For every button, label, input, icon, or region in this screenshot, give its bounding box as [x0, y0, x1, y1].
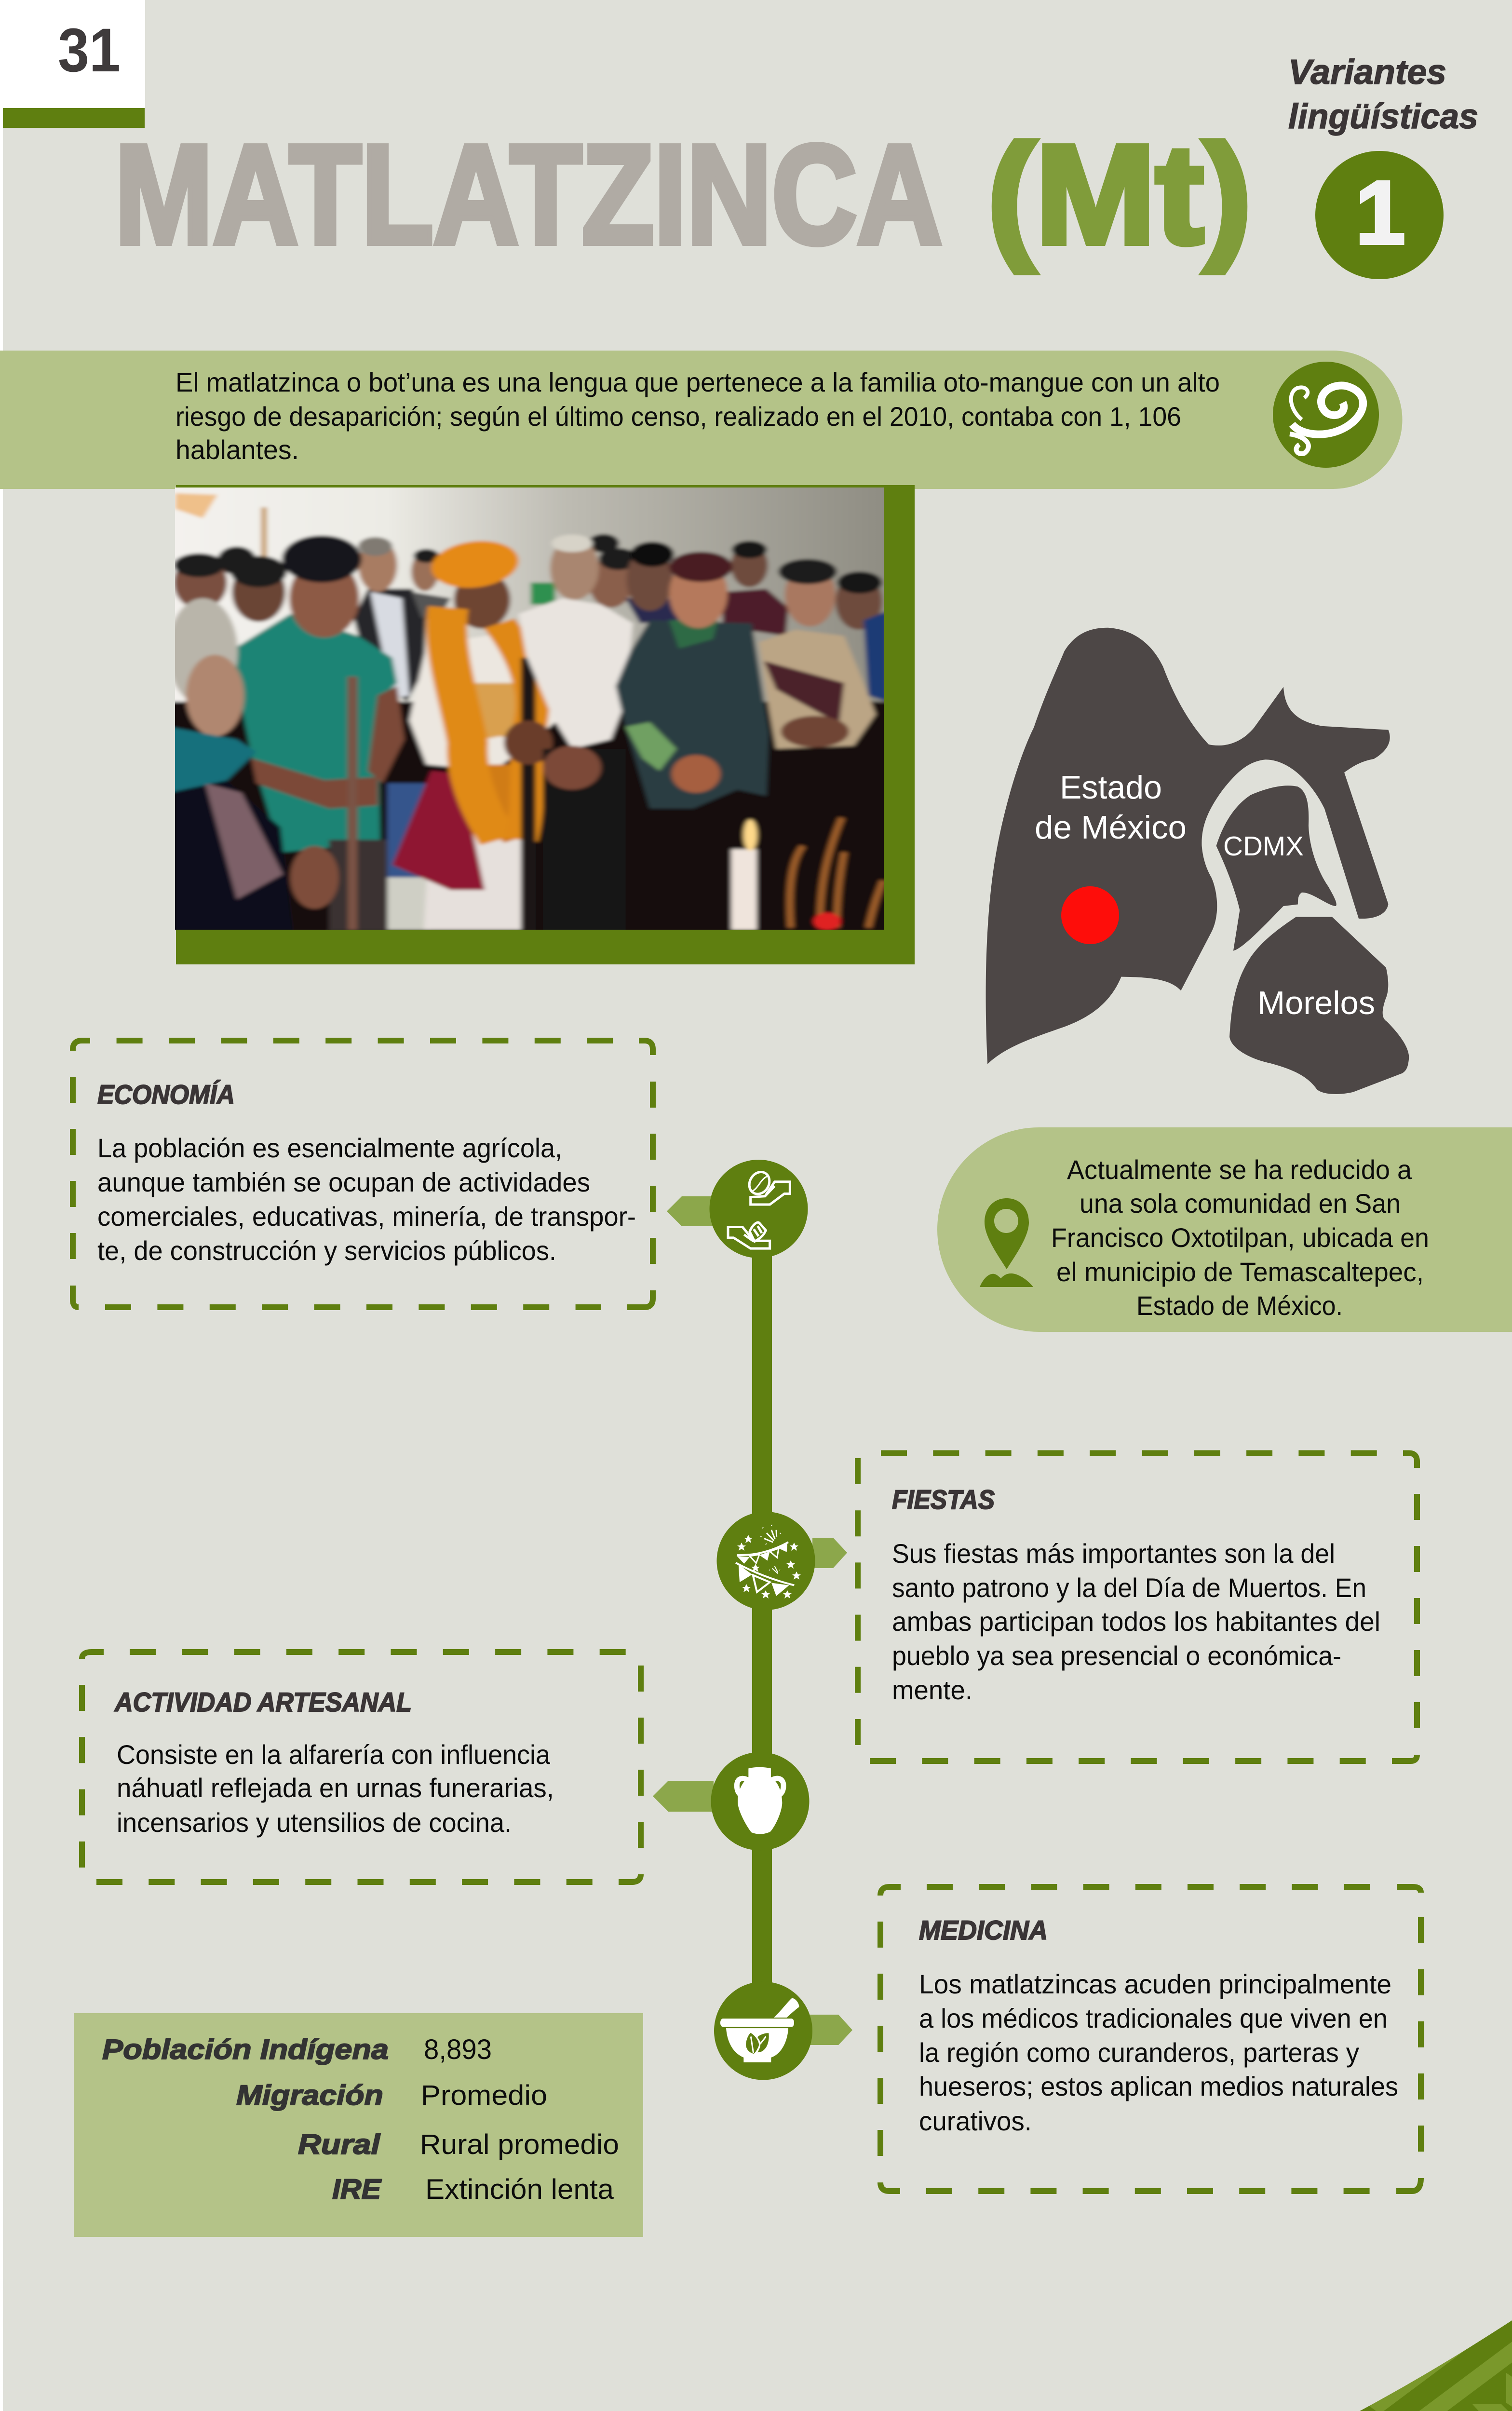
location pill: Estado de México.	[1136, 1290, 1343, 1321]
icon: festive bunting	[716, 1512, 815, 1610]
map labels: Morelos	[1257, 985, 1375, 1021]
variant count badge	[1315, 151, 1444, 279]
panel: actividad artesanal: Consiste en la alfarería con influencia	[117, 1739, 551, 1770]
variantes lingüísticas label: lingüísticas	[1288, 97, 1478, 136]
panel: medicina: MEDICINA	[919, 1915, 1048, 1945]
panel: population stats: Extinción lenta	[425, 2174, 614, 2205]
panel: economía: aunque también se ocupan de actividades	[97, 1167, 590, 1197]
icon: wind swirl	[1273, 362, 1379, 468]
panel: economía: comerciales, educativas, minería, de transpor-	[97, 1201, 636, 1232]
panel: economía: ECONOMÍA	[97, 1079, 235, 1110]
arrow: fiestas	[812, 1538, 847, 1568]
map labels: CDMX	[1223, 831, 1304, 862]
panel: population stats: Población Indígena	[102, 2034, 389, 2065]
panel: fiestas: pueblo ya sea presencial o económica-	[892, 1640, 1341, 1671]
panel: population stats	[74, 2013, 643, 2237]
panel: actividad artesanal: ACTIVIDAD ARTESANAL	[114, 1687, 412, 1717]
panel: population stats: Promedio	[421, 2080, 547, 2111]
map of Estado de México, CDMX and Morelos	[986, 628, 1409, 1094]
panel: medicina: hueseros; estos aplican medios naturales	[919, 2071, 1398, 2101]
panel: economía	[73, 1041, 653, 1307]
panel: population stats: Rural	[298, 2129, 381, 2160]
location marker	[1061, 886, 1119, 944]
map labels: Estado	[1060, 769, 1162, 806]
panel: fiestas	[858, 1453, 1417, 1761]
location pill: Francisco Oxtotilpan, ubicada en	[1051, 1222, 1429, 1253]
panel: fiestas: mente.	[892, 1675, 972, 1705]
timeline	[653, 1160, 852, 2080]
woven pattern footer	[3, 2320, 1512, 2411]
panel: medicina: la región como curanderos, parteras y	[919, 2037, 1359, 2068]
panel: medicina: curativos.	[919, 2106, 1032, 2136]
arrow: artesanal	[653, 1781, 714, 1812]
icon: map pin	[980, 1198, 1033, 1287]
intro band: riesgo de desaparición; según el último censo, realizado en el 2010, contaba con 1, 106	[176, 401, 1181, 432]
map labels: de México	[1035, 809, 1187, 846]
icon: clay jar	[711, 1752, 809, 1851]
title: MATLATZINCA	[115, 116, 942, 273]
panel: population stats: IRE	[332, 2174, 382, 2205]
variantes lingüísticas label	[1288, 53, 1478, 136]
location pill: una sola comunidad en San	[1080, 1188, 1401, 1219]
panel: medicina: a los médicos tradicionales que viven en	[919, 2003, 1388, 2033]
timeline bar	[752, 1254, 772, 1991]
arrow: economy	[667, 1196, 714, 1226]
panel: economía: La población es esencialmente agrícola,	[97, 1133, 562, 1163]
location pill	[937, 1127, 1512, 1332]
icon: hands with beans	[710, 1160, 808, 1258]
stars	[737, 1535, 801, 1598]
icon: mortar and pestle	[714, 1982, 812, 2080]
intro band: El matlatzinca o bot’una es una lengua que pertenece a la familia oto-mangue con un alto	[176, 367, 1220, 397]
page number tab	[3, 0, 145, 128]
map labels	[1035, 769, 1375, 1021]
panel: fiestas: FIESTAS	[892, 1484, 995, 1515]
location pill: Actualmente se ha reducido a	[1067, 1154, 1412, 1185]
panel: economía: te, de construcción y servicios públicos.	[97, 1235, 556, 1266]
panel: medicina	[880, 1887, 1421, 2191]
panel: fiestas: santo patrono y la del Día de Muertos. En	[892, 1572, 1366, 1603]
title: (Mt)	[987, 116, 1252, 274]
photo with green frame	[168, 482, 915, 964]
variant count badge: 1	[1355, 163, 1405, 263]
arrow: medicina	[810, 2015, 852, 2045]
panel: medicina: Los matlatzincas acuden principalmente	[919, 1969, 1391, 1999]
variantes lingüísticas label: Variantes	[1288, 53, 1446, 92]
intro band: hablantes.	[176, 434, 299, 465]
intro band	[0, 351, 1402, 489]
panel: actividad artesanal: náhuatl reflejada en urnas funerarias,	[117, 1773, 554, 1803]
panel: fiestas: Sus fiestas más importantes son la del	[892, 1538, 1335, 1569]
panel: actividad artesanal	[82, 1652, 641, 1882]
panel: population stats: Migración	[236, 2080, 383, 2111]
page number tab: 31	[58, 16, 121, 85]
location pill: el municipio de Temascaltepec,	[1056, 1257, 1424, 1287]
panel: actividad artesanal: incensarios y utensilios de cocina.	[117, 1807, 512, 1838]
panel: population stats: Rural promedio	[420, 2129, 619, 2160]
panel: population stats: 8,893	[424, 2034, 492, 2065]
panel: fiestas: ambas participan todos los habitantes del	[892, 1606, 1380, 1637]
